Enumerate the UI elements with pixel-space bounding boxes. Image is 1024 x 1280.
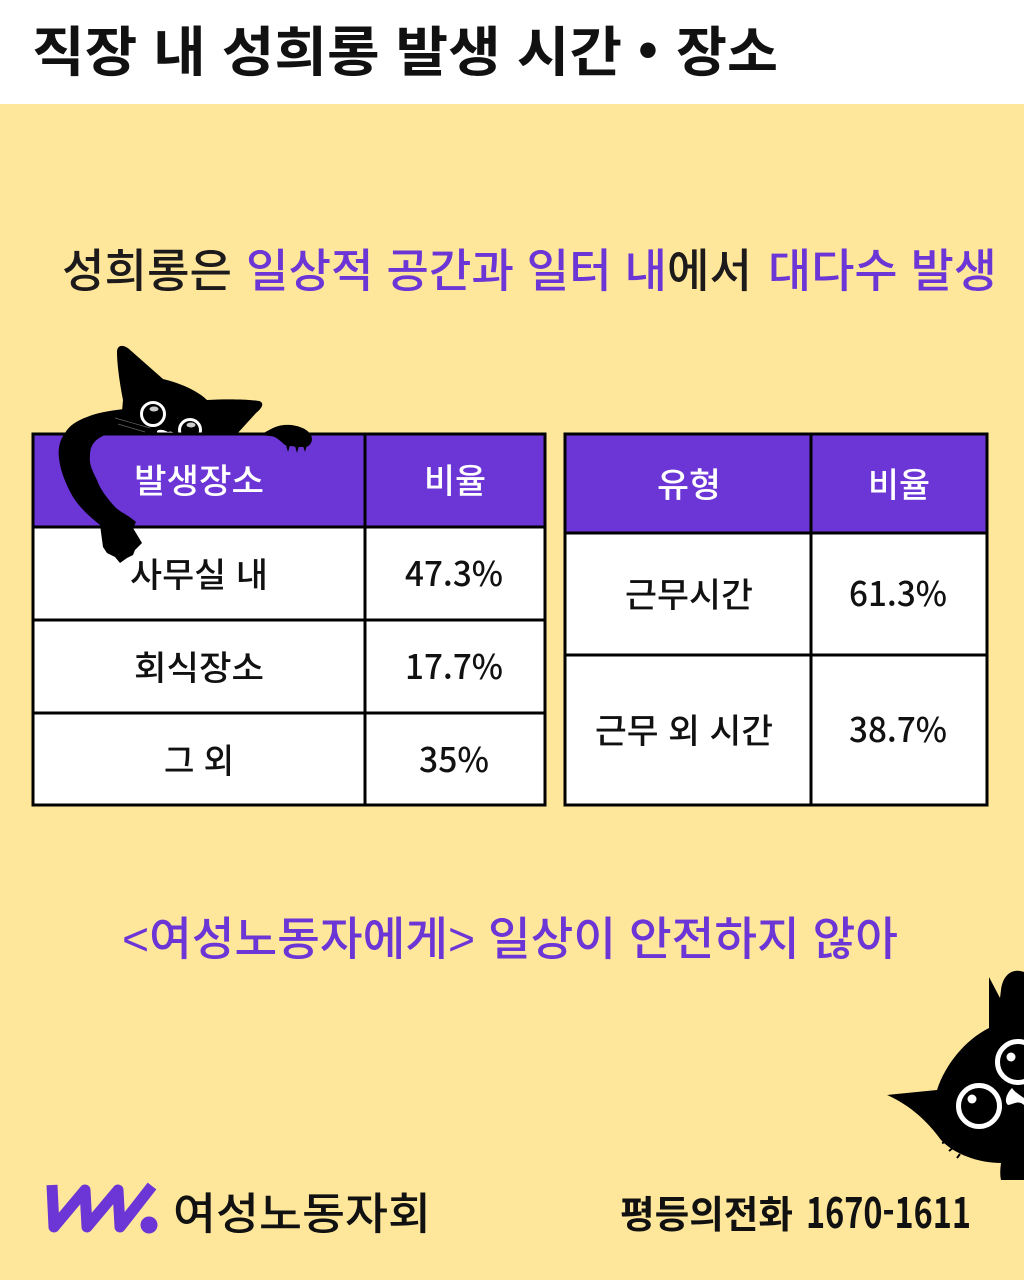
subtitle: 일상적 공간과 일터 내: [246, 245, 667, 297]
row: working hours: 61.3%: [849, 567, 947, 616]
row: working hours: [565, 533, 987, 655]
table header: place: [33, 434, 545, 527]
row: working hours: 근무시간: [625, 577, 753, 615]
logo mark: [52, 1185, 158, 1234]
row: other: [33, 713, 545, 805]
hotline number: 평등의전화: [620, 1195, 793, 1237]
header band with title: •: [639, 20, 657, 80]
table header: type: 유형: [657, 467, 721, 505]
header band with title: 직장 내 성희롱 발생 시간: [32, 23, 622, 83]
logo: women workers association: [52, 1185, 431, 1239]
header band with title: 장소: [676, 23, 778, 83]
row: office: 47.3%: [405, 547, 503, 596]
table header: type: 비율: [868, 467, 930, 505]
subtitle: 성희롱은: [62, 245, 232, 297]
row: company dinner: 회식장소: [134, 650, 264, 688]
row: outside working hours: [565, 655, 987, 805]
icon: black cat peeking from right edge: [887, 971, 1024, 1180]
row: company dinner: 17.7%: [405, 640, 503, 689]
row: other: 그 외: [164, 743, 234, 781]
table header: place: 발생장소: [134, 463, 264, 501]
closing statement: <여성노동자에게> 일상이 안전하지 않아: [122, 913, 898, 965]
row: office: [33, 527, 545, 620]
row: other: 35%: [419, 733, 489, 782]
icon: cat arms over left table: [59, 409, 312, 563]
hotline number: 1670-1611: [806, 1180, 971, 1241]
table header: place: 비율: [424, 463, 486, 501]
table: time type: [565, 434, 987, 805]
row: office: 사무실 내: [130, 557, 268, 595]
icon: black cat head behind left table: [117, 346, 262, 440]
subtitle: 대다수 발생: [768, 245, 997, 297]
row: outside working hours: 38.7%: [849, 703, 947, 752]
header band with title: [0, 0, 1024, 104]
subtitle: [62, 245, 997, 297]
table: place of occurrence: [33, 434, 545, 805]
hotline number: [620, 1180, 971, 1241]
subtitle: 에서: [667, 245, 752, 297]
table header: type: [565, 434, 987, 533]
logo: women workers association: 여성노동자회: [173, 1190, 431, 1239]
row: outside working hours: 근무 외 시간: [595, 713, 773, 751]
row: company dinner: [33, 620, 545, 713]
